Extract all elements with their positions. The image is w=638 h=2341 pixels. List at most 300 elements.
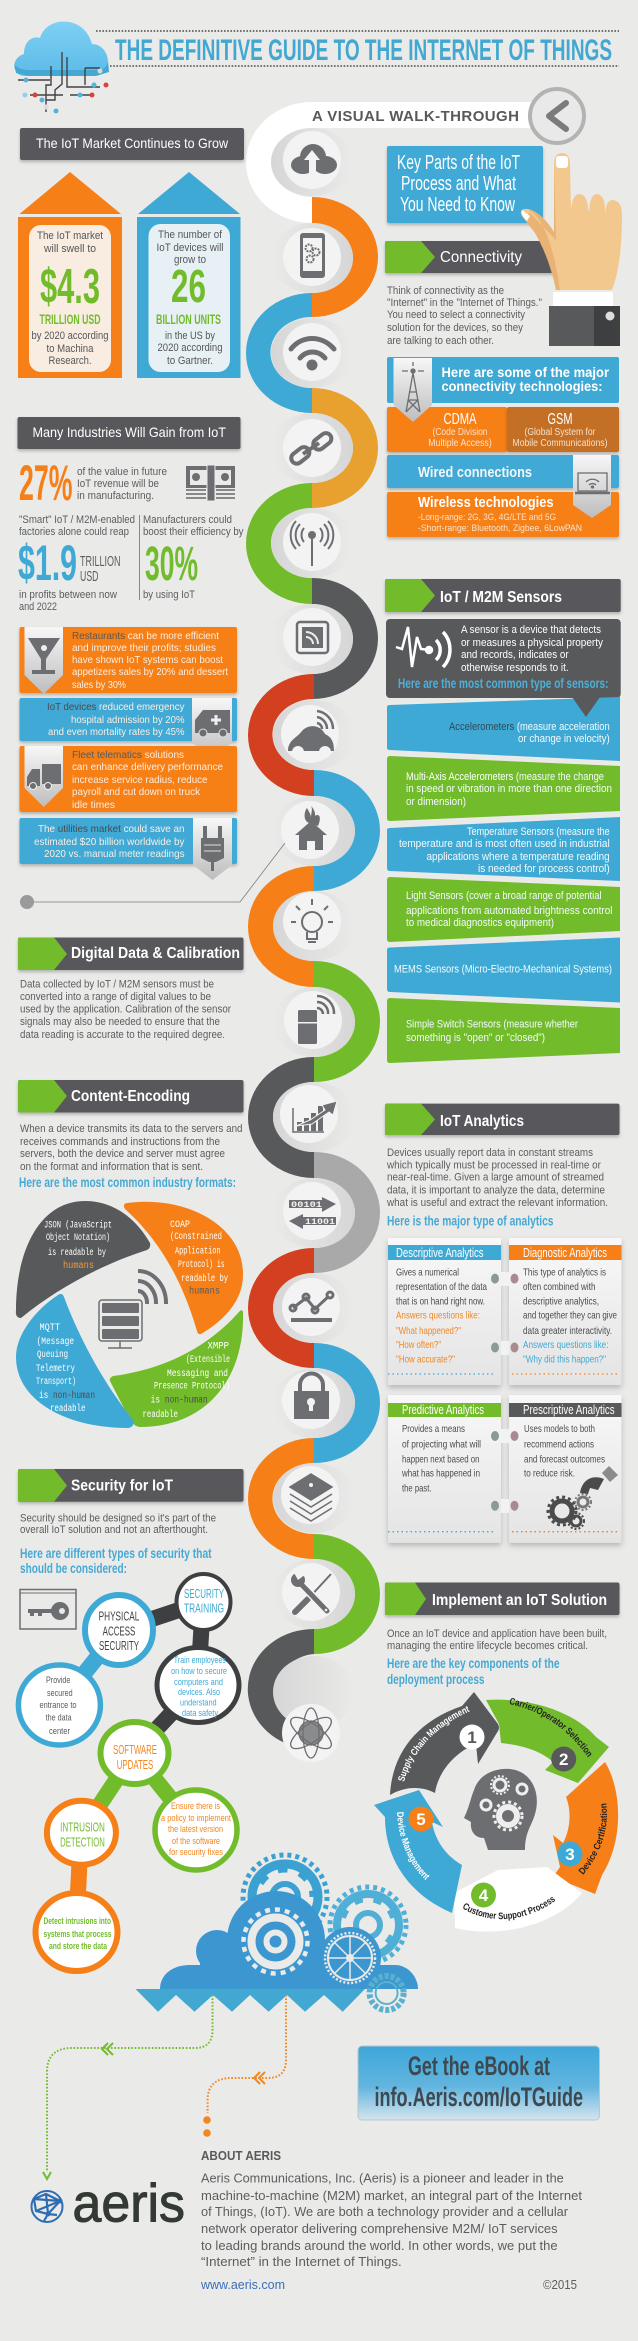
panel: utilities market: The utilities market could save an [38, 823, 185, 835]
stat: smart factories profit [18, 514, 135, 613]
illustration: gears on cloud [136, 1855, 418, 2012]
banner: light sensors: applications from automated brightness control [406, 905, 612, 917]
bubble: ensure policy: for security fixes [169, 1847, 223, 1858]
heading: IoT market [20, 128, 244, 160]
panel: device count house: grow to [174, 254, 206, 266]
arrow 4: customer support process [454, 1867, 582, 1932]
petal: MQTT: Telemetry [36, 1363, 75, 1375]
banner: light sensors: to medical diagnostics equipment) [406, 917, 554, 929]
banner: temperature sensors: temperature and is most often used in industrial [399, 838, 610, 850]
panel: predictive analytics: Predictive Analytics [402, 1402, 484, 1417]
text: about aeris [200, 2148, 582, 2292]
icon: key window [20, 1590, 76, 1629]
arrow 2: carrier selection: 2 [559, 1750, 568, 1769]
heading: content-encoding: Content-Encoding [71, 1088, 190, 1105]
panel: sensor definition: or measures a physical property [461, 637, 603, 649]
heading: digital data and calibration [18, 938, 244, 970]
petal: MQTT: (Message [37, 1336, 74, 1348]
petal: COAP: COAP [170, 1220, 190, 1231]
petal: XMPP: Presence Protocol) [154, 1381, 230, 1393]
panel: descriptive analytics: representation of the data [396, 1281, 487, 1293]
stat: efficiency 30 percent: by using IoT [143, 589, 195, 601]
text: content-encoding body [19, 1123, 242, 1190]
banner: light sensors: Light Sensors (cover a broad range of potential [406, 890, 602, 902]
panel: diagnostic analytics: "Why did this happen?" [523, 1354, 606, 1366]
panel: fleet telematics: can enhance delivery performance [72, 761, 223, 773]
arrow 5: device management: Device Management [397, 1812, 430, 1880]
stat: 27 percent manufacturing [19, 455, 167, 511]
petal: JSON: JSON (JavaScript [44, 1220, 112, 1232]
petal: COAP: readable by [181, 1273, 228, 1285]
panel: key parts blue box [387, 146, 543, 223]
panel: major connectivity technologies: -Short-range: Bluetooth, Zigbee, 6LowPAN [418, 523, 582, 534]
panel: diagnostic analytics: descriptive analytics, [523, 1296, 599, 1308]
text: about aeris: machine-to-machine (M2M) market, an integral part of the Internet [201, 2188, 582, 2203]
text: analytics body: near-real-time. Given a large amount of streamed [387, 1172, 604, 1184]
arrow 2: carrier selection [486, 1698, 609, 1783]
panel: device count house: BILLION UNITS [156, 311, 221, 327]
header cloud logo with circuit [14, 21, 109, 113]
panel: device count house: IoT devices will [156, 242, 224, 254]
panel: key parts blue box: Process and What [401, 173, 516, 195]
icon circles along the spine [280, 131, 342, 1762]
banner: simple switch sensors [387, 998, 620, 1063]
text: connectivity intro [387, 285, 542, 347]
text: analytics body: what is useful and extract the relevant information. [386, 1197, 608, 1209]
bubble: software updates [100, 1722, 168, 1784]
panel: key parts blue box: Key Parts of the IoT [397, 152, 520, 174]
panel: hospital: IoT devices reduced emergency [47, 701, 185, 713]
panel: predictive analytics [388, 1395, 501, 1543]
panel: major connectivity technologies: Mobile Communications) [512, 438, 608, 449]
arrow 3: device certification: 3 [565, 1845, 575, 1864]
panel: major connectivity technologies: GSM [548, 411, 572, 428]
panel: market size house: will swell to [43, 243, 96, 255]
text: security body: overall IoT solution and not an afterthought. [20, 1524, 208, 1536]
petal: JSON: humans [63, 1260, 94, 1272]
panel: descriptive analytics: "What happened?" [396, 1325, 461, 1337]
panel: descriptive analytics: Answers questions like: [396, 1310, 480, 1322]
arrow 3: device certification [553, 1762, 618, 1894]
banner: light sensors [387, 877, 620, 942]
panel: major connectivity technologies: Multiple Access) [428, 438, 492, 449]
heading: digital data and calibration: Digital Data & Calibration [71, 945, 240, 962]
panel: major connectivity technologies: -Long-range: 2G, 3G, 4G/LTE and 5G [418, 512, 556, 523]
panel: device count house [137, 172, 240, 378]
panel: descriptive analytics: Descriptive Analytics [396, 1245, 484, 1260]
petal: JSON: Object Notation) [46, 1232, 110, 1244]
arrow 2: carrier selection: Carrier/Operator Selection [510, 1698, 592, 1758]
panel: prescriptive analytics [509, 1395, 622, 1543]
bubble: security training [176, 1574, 230, 1630]
text: content-encoding body: Here are the most common industry formats: [19, 1174, 236, 1190]
walk-through heading and back button [312, 89, 584, 143]
stat: efficiency 30 percent [143, 514, 244, 601]
icon: wrench and screwdriver [291, 1571, 331, 1612]
stat: 27 percent manufacturing: 27% [19, 455, 72, 511]
text: analytics body: Devices usually report data in constant streams [387, 1147, 593, 1159]
icon: light bulb [291, 899, 333, 942]
panel: diagnostic analytics [509, 1238, 622, 1385]
text: calibration body: signals may also be needed to ensure that the [20, 1016, 220, 1028]
bubble: train employees: understand [180, 1698, 217, 1709]
petal: XMPP: XMPP [208, 1342, 229, 1353]
bubble: software updates: UPDATES [117, 1757, 153, 1772]
panel: market size house: by 2020 according [32, 330, 108, 342]
bubble: physical access security: PHYSICAL [99, 1609, 139, 1624]
icon: growth chart [293, 1101, 337, 1132]
text: calibration body [20, 978, 231, 1041]
arrow: green dotted path to logo [43, 1995, 212, 2179]
heading: content-encoding [18, 1080, 244, 1112]
text: calibration body: converted into a range of digital values to be [20, 991, 211, 1003]
text: content-encoding body: on the format and information that is sent. [20, 1161, 203, 1173]
connectors between analytics cards [491, 1272, 518, 1513]
panel: utilities market: estimated $20 billion worldwide by [34, 836, 185, 848]
panel: fleet telematics: increase service radius, reduce [72, 774, 208, 786]
panel: prescriptive analytics: to reduce risk. [524, 1468, 575, 1480]
text: deployment intro: Here are the key components of the [387, 1655, 560, 1671]
panel: market size house: Research. [48, 355, 92, 367]
stat: smart factories profit: "Smart" IoT / M2M-enabled [19, 514, 135, 526]
petal: MQTT: Queuing [37, 1349, 68, 1361]
icon: atom globe [286, 1708, 336, 1758]
bubble: train employees: data safety [182, 1708, 218, 1719]
banner: temperature sensors: applications where a temperature reading [426, 851, 610, 863]
petal: COAP: (Constrained [170, 1231, 222, 1243]
text: about aeris: ABOUT AERIS [201, 2148, 281, 2163]
text: about aeris: “Internet” in the Internet of Things. [201, 2254, 402, 2269]
heading: IoT analytics: IoT Analytics [440, 1113, 524, 1130]
text: connectivity intro: solution for the devices, so they [387, 322, 523, 334]
petal: COAP: humans [189, 1286, 220, 1298]
text: deployment intro [387, 1628, 607, 1687]
icon: sensor pulse [396, 627, 450, 667]
bubble: ensure policy: a policy to implement [161, 1813, 231, 1824]
panel: restaurants: Restaurants can be more efficient [72, 630, 219, 642]
arrow 3: device certification: Device Certification [578, 1804, 607, 1875]
bubble: secured entrance: the data [46, 1713, 72, 1724]
icon: layers network [290, 1474, 332, 1521]
panel: device count house: The number of [158, 229, 223, 241]
panel: major connectivity technologies: (Code Division [432, 427, 488, 438]
text: about aeris: network operator delivering comprehensive M2M/ IoT services [201, 2221, 558, 2236]
heading: connectivity [385, 241, 555, 273]
icon: pointing hand [521, 153, 622, 346]
stat: smart factories profit: in profits between now [19, 589, 117, 601]
heading: IoT analytics [385, 1104, 620, 1135]
banner: accelerometers [387, 697, 620, 761]
petal: MQTT: readable [50, 1403, 86, 1415]
panel: sensor definition: and records, indicates or [461, 649, 569, 661]
stat: smart factories profit: TRILLION [80, 553, 120, 570]
petal: XMPP: is non-human [151, 1394, 208, 1406]
bubble: ensure policy [155, 1790, 237, 1870]
heading: security for IoT: Security for IoT [71, 1478, 173, 1495]
text: connectivity intro: are talking to each other. [387, 335, 494, 347]
bubble: intrusion detection: INTRUSION [60, 1820, 105, 1835]
spine: winding road [246, 102, 533, 1743]
heading: IoT / M2M sensors: IoT / M2M Sensors [440, 589, 562, 606]
panel: descriptive analytics [388, 1238, 501, 1385]
icon: wifi [291, 338, 334, 368]
call to action button: Get the eBook at [408, 2051, 550, 2081]
text: about aeris: www.aeris.com [200, 2277, 285, 2292]
arrow 5: device management [374, 1790, 462, 1913]
icon: binary arrows [289, 1197, 336, 1229]
panel: diagnostic analytics: often combined with [523, 1281, 596, 1293]
panel: fleet telematics: payroll and cut down on truck [72, 786, 201, 798]
bubble: train employees: on how to secure [171, 1666, 227, 1677]
bubble: train employees: devices. Also [178, 1687, 220, 1698]
bubble: detect intrusions [36, 1893, 118, 1971]
petal: XMPP: readable [142, 1409, 178, 1421]
bubble: intrusion detection [47, 1801, 116, 1865]
stat: smart factories profit: $1.9 [18, 535, 77, 591]
text: calibration body: used by the application. Calibration of the sensor [20, 1004, 231, 1016]
bubble: secured entrance: secured [47, 1688, 73, 1699]
panel: key parts blue box: You Need to Know [400, 194, 515, 216]
stat: smart factories profit: factories alone could reap [19, 526, 129, 538]
arrow 1: supply chain management: Supply Chain Management [398, 1706, 470, 1782]
heading: implement an IoT solution: Implement an IoT Solution [432, 1592, 607, 1609]
bubble: detect intrusions: and store the data [49, 1941, 108, 1952]
text: security body: Security should be designed so it's part of the [20, 1513, 216, 1525]
banner: accelerometers: Accelerometers (measure acceleration [449, 721, 610, 733]
stat: efficiency 30 percent: 30% [145, 538, 198, 591]
bubble: secured entrance [18, 1665, 100, 1745]
stat: 27 percent manufacturing: of the value in future [77, 466, 167, 478]
bubble: ensure policy: the latest version [168, 1824, 223, 1835]
text: connectivity intro: "Internet" in the "Internet of Things." [387, 297, 542, 309]
panel: hospital: hospital admission by 20% [71, 714, 184, 726]
bubble: ensure policy: Ensure there is [171, 1801, 220, 1812]
arrow 1: supply chain management [390, 1692, 499, 1795]
panel: device count house: 2020 according [158, 342, 222, 354]
panel: restaurants: appetizers sales by 20% and dessert [72, 666, 228, 678]
petal: COAP: Application [175, 1246, 220, 1258]
logo: aeris: aeris [72, 2174, 185, 2234]
bubble: detect intrusions: systems that process [44, 1929, 112, 1940]
icon: binary arrows: 00101 [291, 1200, 322, 1210]
icon: smart fridge [298, 996, 334, 1044]
panel: diagnostic analytics: Diagnostic Analytics [523, 1245, 607, 1260]
panel: market size house: The IoT market [37, 230, 103, 242]
stat: efficiency 30 percent: boost their efficiency by [143, 526, 244, 538]
icon: money stacks [186, 465, 235, 501]
panel: predictive analytics: Provides a means [402, 1423, 465, 1435]
bubble: detect intrusions: Detect intrusions into [44, 1916, 111, 1927]
panel: market size house: $4.3 [40, 260, 100, 314]
panel: descriptive analytics: "How accurate?" [396, 1354, 455, 1366]
icon: head with gears [464, 1769, 537, 1850]
stat: 27 percent manufacturing: IoT revenue will be [77, 478, 159, 490]
diagram: deployment cycle [374, 1692, 618, 1932]
chart: industry format petals [16, 1201, 243, 1428]
panel: market size house: to Machina [46, 343, 94, 355]
text: analytics body [386, 1147, 608, 1229]
panel: restaurants [20, 627, 237, 694]
banner: temperature sensors: is needed for process control) [478, 863, 610, 875]
panel: descriptive analytics: "How often?" [396, 1339, 441, 1351]
banner: accelerometers: or change in velocity) [518, 733, 610, 745]
text: connectivity intro: You need to select a connectivity [387, 309, 525, 321]
stat: smart factories profit: USD [80, 568, 99, 585]
panel: prescriptive analytics: and forecast outcomes [524, 1454, 605, 1466]
panel: market size house [18, 172, 122, 378]
text: about aeris: Aeris Communications, Inc. (Aeris) is a pioneer and leader in the [201, 2171, 564, 2186]
heading: many industries [18, 417, 240, 449]
bubble: train employees: Train employees [174, 1655, 226, 1666]
panel: sensor definition [386, 619, 621, 698]
petal: COAP [124, 1202, 243, 1334]
icon: smart home [295, 804, 327, 851]
panel: major connectivity technologies: CDMA [444, 411, 477, 428]
panel: predictive analytics: of projecting what will [402, 1438, 481, 1450]
panel: predictive analytics: happen next based on [402, 1454, 480, 1466]
stat: 27 percent manufacturing: in manufacturing. [77, 490, 154, 502]
arrow 5: device management: 5 [416, 1810, 426, 1829]
panel: prescriptive analytics: recommend actions [524, 1438, 594, 1450]
bubble: physical access security: SECURITY [99, 1638, 139, 1653]
panel: utilities market: 2020 vs. manual meter readings [44, 848, 184, 860]
bubble connectors [59, 1602, 203, 1932]
panel: restaurants: and improve their profits; studies [72, 642, 216, 654]
panel: hospital [20, 698, 237, 758]
bubble: intrusion detection: DETECTION [60, 1835, 105, 1850]
petal: MQTT [16, 1294, 133, 1428]
panel: diagnostic analytics: Answers questions like: [523, 1339, 608, 1351]
panel: sensor definition: A sensor is a device that detects [461, 624, 601, 636]
text: connectivity intro: Think of connectivity as the [387, 285, 504, 297]
text: analytics body: which typically must be processed in real-time or [386, 1160, 601, 1172]
bubble: software updates: SOFTWARE [113, 1742, 157, 1757]
icon: binary arrows: 11001 [305, 1217, 335, 1227]
icon: tablet signal [297, 622, 328, 653]
text: content-encoding body: receives commands and instructions from the [20, 1136, 220, 1148]
panel: diagnostic analytics: This type of analytics is [523, 1267, 606, 1279]
text: about aeris: to leading brands around the world. In other words, we put the [201, 2238, 558, 2253]
heading: many industries: Many Industries Will Gain from IoT [32, 424, 226, 440]
heading: IoT market: The IoT Market Continues to Grow [36, 135, 229, 151]
stat: smart factories profit: and 2022 [19, 601, 57, 613]
walk-through heading and back button: A VISUAL WALK-THROUGH [312, 108, 519, 125]
panel: major connectivity technologies: (Global System for [524, 427, 596, 438]
petal: JSON: is readable by [48, 1247, 106, 1259]
panel: device count house: 26 [171, 260, 206, 312]
banner: MEMS sensors [387, 938, 620, 1002]
call to action button [358, 2046, 600, 2120]
panel: prescriptive analytics: Uses models to both [524, 1423, 595, 1435]
panel: predictive analytics: the past. [402, 1483, 432, 1495]
petal: MQTT: is non-human [39, 1390, 95, 1402]
text: security body: should be considered: [20, 1560, 127, 1576]
text: analytics body: Here is the major type of analytics [387, 1213, 554, 1229]
banner: multi-axis accelerometers: in speed or vibration in more than one direction [406, 783, 612, 795]
callout line from home icon [20, 843, 285, 909]
heading: IoT / M2M sensors [385, 579, 621, 612]
panel: fleet telematics: idle times [72, 799, 115, 811]
heading: security for IoT [18, 1469, 244, 1502]
text: deployment intro: managing the entire lifecycle becomes critical. [387, 1640, 588, 1652]
icon: cloud upload [291, 144, 337, 175]
panel: major connectivity technologies [387, 357, 619, 537]
bubble: physical access security: ACCESS [103, 1624, 136, 1639]
icon: connected car [288, 711, 334, 758]
icon: hand placing gears [548, 1466, 618, 1529]
bubble: train employees [157, 1648, 239, 1722]
text: deployment intro: deployment process [387, 1671, 485, 1687]
banner: multi-axis accelerometers: Multi-Axis Accelerometers (measure the change [406, 771, 604, 783]
text: calibration body: Data collected by IoT / M2M sensors must be [20, 978, 214, 990]
text: about aeris: ©2015 [543, 2277, 577, 2292]
bubble: security training: TRAINING [184, 1601, 224, 1616]
stat: efficiency 30 percent: Manufacturers could [143, 514, 232, 526]
text: analytics body: data, it is important to analyze the data, determine [387, 1185, 605, 1197]
panel: major connectivity technologies: connectivity technologies: [442, 378, 602, 394]
icon: smartphone with gears [300, 233, 325, 278]
panel: device count house: to Gartner. [167, 355, 213, 367]
text: security body [20, 1513, 216, 1576]
petal: JSON [16, 1201, 150, 1318]
petal: MQTT: Transport) [36, 1376, 76, 1388]
banner: simple switch sensors: something is "open" or "closed") [406, 1032, 545, 1044]
heading: connectivity: Connectivity [440, 249, 522, 266]
panel: market size house: TRILLION USD [40, 311, 100, 327]
panel: predictive analytics: what has happened in [401, 1468, 480, 1480]
panel: major connectivity technologies: Wireless technologies [418, 494, 554, 511]
banner: temperature sensors [387, 817, 620, 881]
bubble: secured entrance: Provide [46, 1675, 70, 1686]
text: deployment intro: Once an IoT device and application have been built, [387, 1628, 607, 1640]
panel: descriptive analytics: that is on hand right now. [396, 1296, 485, 1308]
text: about aeris: of Things, (IoT). We are both a technology provider and a cellular [201, 2204, 569, 2219]
panel: restaurants: sales by 30% [72, 679, 126, 691]
bubble: security training: SECURITY [184, 1586, 224, 1601]
icon: line graph [290, 1292, 333, 1320]
petal: MQTT: MQTT [40, 1323, 60, 1334]
bubble: secured entrance: entrance to [40, 1700, 76, 1711]
text: content-encoding body: servers, both the device and server must agree [20, 1148, 225, 1160]
banner: multi-axis accelerometers [387, 756, 620, 821]
icon: padlock [294, 1374, 329, 1419]
bubble: physical access security [85, 1595, 153, 1665]
icon: chain link [289, 431, 334, 466]
panel: fleet telematics [20, 746, 237, 812]
diagram: security bubbles [18, 1574, 239, 1971]
petal: XMPP [110, 1310, 243, 1427]
heading: implement an IoT solution [385, 1582, 620, 1615]
arrow 1: supply chain management: 1 [467, 1728, 477, 1747]
panel: device count house: in the US by [165, 330, 215, 342]
text: security body: Here are different types of security that [20, 1545, 212, 1561]
petal: XMPP: Messaging and [167, 1368, 228, 1380]
panel: fleet telematics: Fleet telematics solutions [72, 749, 184, 761]
petal: COAP: Protocol) is [178, 1259, 225, 1271]
banner: temperature sensors: Temperature Sensors (measure the [467, 826, 610, 838]
arrow 4: customer support process: 4 [479, 1886, 489, 1905]
bubble: train employees: computers and [174, 1677, 223, 1688]
panel: descriptive analytics: Gives a numerical [396, 1267, 459, 1279]
petal: XMPP: (Extensible [186, 1354, 230, 1366]
text: calibration body: data reading is accurate to the required degree. [20, 1029, 225, 1041]
bubble: secured entrance: center [49, 1726, 70, 1737]
panel: sensor definition: otherwise responds to it. [461, 662, 569, 674]
arrow 4: customer support process: Customer Support Process [463, 1897, 555, 1921]
panel: hospital: and even mortality rates by 45% [48, 726, 184, 738]
icon: server with wireless [99, 1271, 166, 1348]
panel: utilities market [20, 818, 237, 880]
